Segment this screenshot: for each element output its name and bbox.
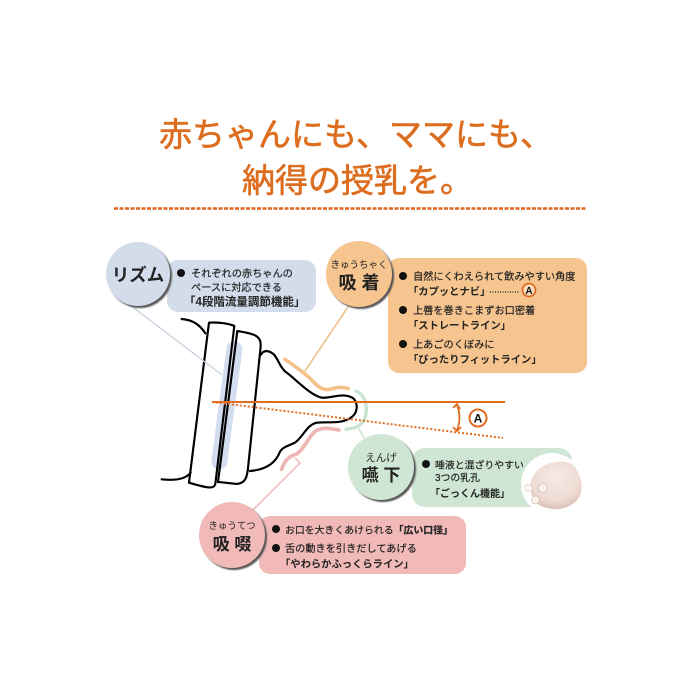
swallow circle: えんげ (365, 452, 397, 464)
dashed title rule (114, 207, 587, 210)
latch-on text box: 「ストレートライン」 (408, 319, 511, 332)
rhythm text box (167, 260, 316, 312)
latch-on circle (326, 241, 394, 309)
panel: suck (199, 502, 466, 574)
panel: rhythm (106, 242, 316, 312)
rhythm text box: 「4段階流量調節機能」 (184, 294, 305, 308)
bottle outline (162, 319, 357, 487)
latch-on text box: 上唇を巻きこまずお口密着 (413, 304, 535, 317)
swallow text box: 3つの乳孔 (435, 472, 480, 484)
icon: nipple photo (521, 453, 583, 515)
flow band highlight (219, 349, 234, 462)
latch-on text box: 上あごのくぼみに (413, 338, 494, 351)
latch-on text box: 自然にくわえられて飲みやすい角度 (413, 270, 576, 283)
suck text box: 「やわらかふっくらライン」 (280, 558, 414, 570)
icon: A marker: A (474, 412, 483, 426)
leader lines (130, 305, 364, 510)
bottle diagram (162, 319, 366, 487)
suck circle: きゅうてつ (208, 521, 256, 532)
latch-on circle: きゅうちゃく (330, 260, 388, 271)
swallow text box: 「ごっくん機能」 (430, 487, 510, 500)
suck circle (199, 502, 267, 570)
suck text box: お口を大きくあけられる「広い口径」 (285, 524, 453, 536)
latch-on text box (388, 258, 587, 373)
arrow: angle A (453, 404, 461, 431)
rhythm text box: ペースに対応できる (191, 281, 282, 294)
swallow circle (348, 434, 416, 502)
icon: A marker (470, 410, 486, 426)
latch-on text box: A (525, 286, 533, 297)
latch-on text box: 「ぴったりフィットライン」 (408, 353, 542, 366)
title (159, 116, 553, 199)
swallow circle: 嚥 下 (362, 465, 400, 485)
latch-on circle: 吸 着 (338, 273, 380, 293)
latch-on text box: 「カプッとナビ」 (408, 285, 490, 298)
angle lines (212, 402, 505, 438)
latch-on highlight (285, 359, 348, 390)
panel: latch-on (326, 241, 587, 373)
swallow highlight (346, 391, 366, 429)
suck text box: 舌の動きを引きだしてあげる (285, 542, 417, 555)
swallow text box (412, 448, 572, 507)
rhythm text box: それぞれの赤ちゃんの (191, 268, 293, 280)
title: 赤ちゃんにも、ママにも、 (159, 116, 553, 153)
suck text box (259, 516, 466, 574)
rhythm circle (106, 242, 172, 308)
suck highlight (282, 428, 339, 469)
panel: swallow (348, 434, 583, 515)
rhythm circle: リズム (112, 265, 164, 285)
suck circle: 吸 啜 (213, 535, 251, 554)
title: 納得の授乳を。 (242, 162, 473, 199)
swallow text box: 唾液と混ざりやすい (435, 458, 524, 472)
